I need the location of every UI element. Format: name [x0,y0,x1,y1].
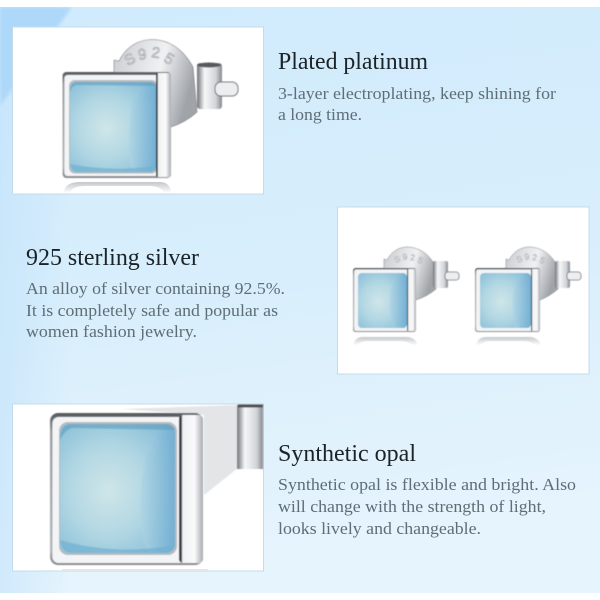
reflection [64,182,171,193]
S925 stamp: S925 [122,44,177,69]
square frame [50,413,203,565]
opal stone [70,82,156,172]
heading: 925 sterling silver: 925 sterling silver [26,245,199,271]
panel: plated platinum photo [12,27,264,194]
heading: Synthetic opal: Synthetic opal [278,441,416,467]
opal stone [60,424,175,553]
text: sterling silver description: An alloy of silver containing 92.5%. [26,279,285,298]
icon: right earring [475,247,581,345]
text: synthetic opal description: will change with the strength of light, [278,497,546,516]
text: plated platinum description: a long time. [278,105,362,124]
earring post tube [237,405,263,469]
text: plated platinum description: 3-layer electroplating, keep shining for [278,84,556,103]
earring back disc [114,40,197,127]
text: synthetic opal description: Synthetic opal is flexible and bright. Also [278,475,576,494]
frame right bar [156,73,171,177]
frame right bar [179,415,203,563]
earring post tube [197,63,222,109]
reflection [62,569,208,571]
earring back [122,405,238,495]
text: sterling silver description: It is completely safe and popular as [26,301,278,320]
icon: stud earring close-up [62,40,238,178]
heading: Plated platinum: Plated platinum [278,49,428,75]
icon: left earring [353,247,459,345]
icon: stud earring macro [50,404,263,565]
text: synthetic opal description: looks lively and changeable. [278,519,481,538]
panel: synthetic opal photo [12,404,264,571]
panel: pair of earrings photo [338,207,589,374]
text: sterling silver description: women fashion jewelry. [26,322,197,341]
earring pin [215,82,238,96]
icon: right earring: S925 [515,251,547,266]
icon: left earring: S925 [393,251,425,266]
square frame [62,72,171,178]
